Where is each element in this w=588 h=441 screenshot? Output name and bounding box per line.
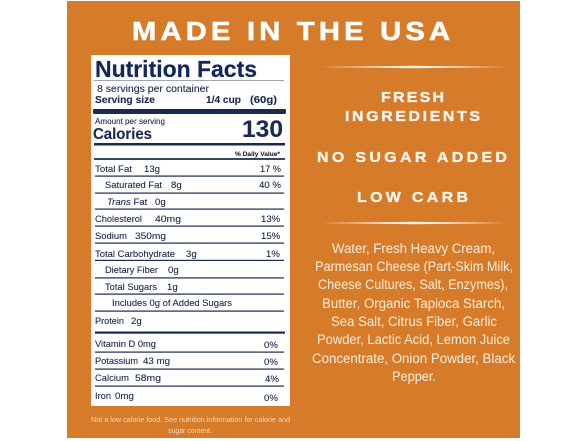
ingredients text: Butter, Organic Tapioca Starch, [322,296,505,311]
nutrient rows: 15% [261,231,281,242]
ingredients text: Cheese Cultures, Salt, Enzymes), [318,277,508,292]
calories block [93,116,283,143]
calories block: 130 [242,116,283,143]
nutrient rows: Vitamin D 0mg [95,339,156,350]
nutrient rows: 8g [171,180,182,191]
nutrient rows: Total Sugars [105,282,157,293]
nutrient rows: Saturated Fat [105,180,162,191]
ingredients text: Pepper. [392,369,436,384]
serving information: 8 servings per container [97,84,210,95]
nutrient rows: 43 mg [143,356,170,367]
nutrition heading: Nutrition Facts [95,56,257,82]
footnote [91,415,290,435]
nutrient rows: 40 % [259,180,281,191]
claims list: FRESH [381,90,444,106]
nutrient rows: Dietary Fiber [105,265,159,276]
top divider [320,66,507,68]
ingredients text: Powder, Lactic Acid, Lemon Juice [317,332,510,347]
nutrient rows: 350mg [135,231,166,242]
nutrient rows: 58mg [135,373,161,384]
nutrient rows: Includes 0g of Added Sugars [112,298,232,309]
nutrient rows: 3g [186,249,197,260]
title: MADE IN THE USA [132,16,450,46]
claims list [317,90,507,206]
nutrient rows: 0g [168,265,179,276]
nutrient rows: 0% [264,357,278,368]
ingredients text: Concentrate, Onion Powder, Black [312,351,515,366]
claims list: INGREDIENTS [345,109,480,125]
orange background panel [67,1,520,438]
claims list: NO SUGAR ADDED [317,150,507,166]
nutrient rows: 0mg [115,391,134,402]
ingredients text: Sea Salt, Citrus Fiber, Garlic [331,314,497,329]
ingredients text [312,241,515,384]
serving information: Serving size [95,95,155,106]
ingredients text: Parmesan Cheese (Part-Skim Milk, [315,259,513,274]
serving information: 1/4 cup [206,95,241,106]
calories block: Amount per serving [95,117,165,126]
nutrient rows: 17 % [260,164,281,175]
nutrient rows: Potassium [95,356,138,367]
daily value header: % Daily Value* [235,152,281,158]
nutrient rows: 1% [266,249,280,260]
nutrient rows: Sodium [95,231,127,242]
nutrient rows: Iron [95,391,111,402]
nutrient rows: 40mg [155,214,181,225]
serving information: (60g) [250,95,277,106]
nutrient rows: 0g [155,197,166,208]
calories block: Calories [93,126,152,143]
nutrient rows: 0% [264,340,278,351]
bottom divider [320,222,507,224]
nutrient rows: 4% [265,374,279,385]
nutrient rows: Trans Fat [107,197,148,208]
nutrient rows: Total Fat [95,164,132,175]
nutrient rows: Cholesterol [95,214,142,225]
nutrient rows [95,164,285,404]
nutrient rows: Protein [95,316,124,327]
nutrient rows: 13g [144,164,160,175]
ingredients text: Water, Fresh Heavy Cream, [332,241,495,256]
serving information [95,84,277,106]
footnote: sugar content. [168,426,212,435]
nutrient rows: 2g [131,316,142,327]
panel: nutrition facts label [91,55,290,406]
nutrient rows: Calcium [95,373,129,384]
nutrient rows: 1g [167,282,178,293]
claims list: LOW CARB [357,190,468,206]
footnote: Not a low calorie food. See nutrition information for calorie and [91,415,290,424]
nutrient rows: 0% [264,393,278,404]
nutrient rows: 13% [261,214,281,225]
nutrient rows: Total Carbohydrate [95,249,175,260]
